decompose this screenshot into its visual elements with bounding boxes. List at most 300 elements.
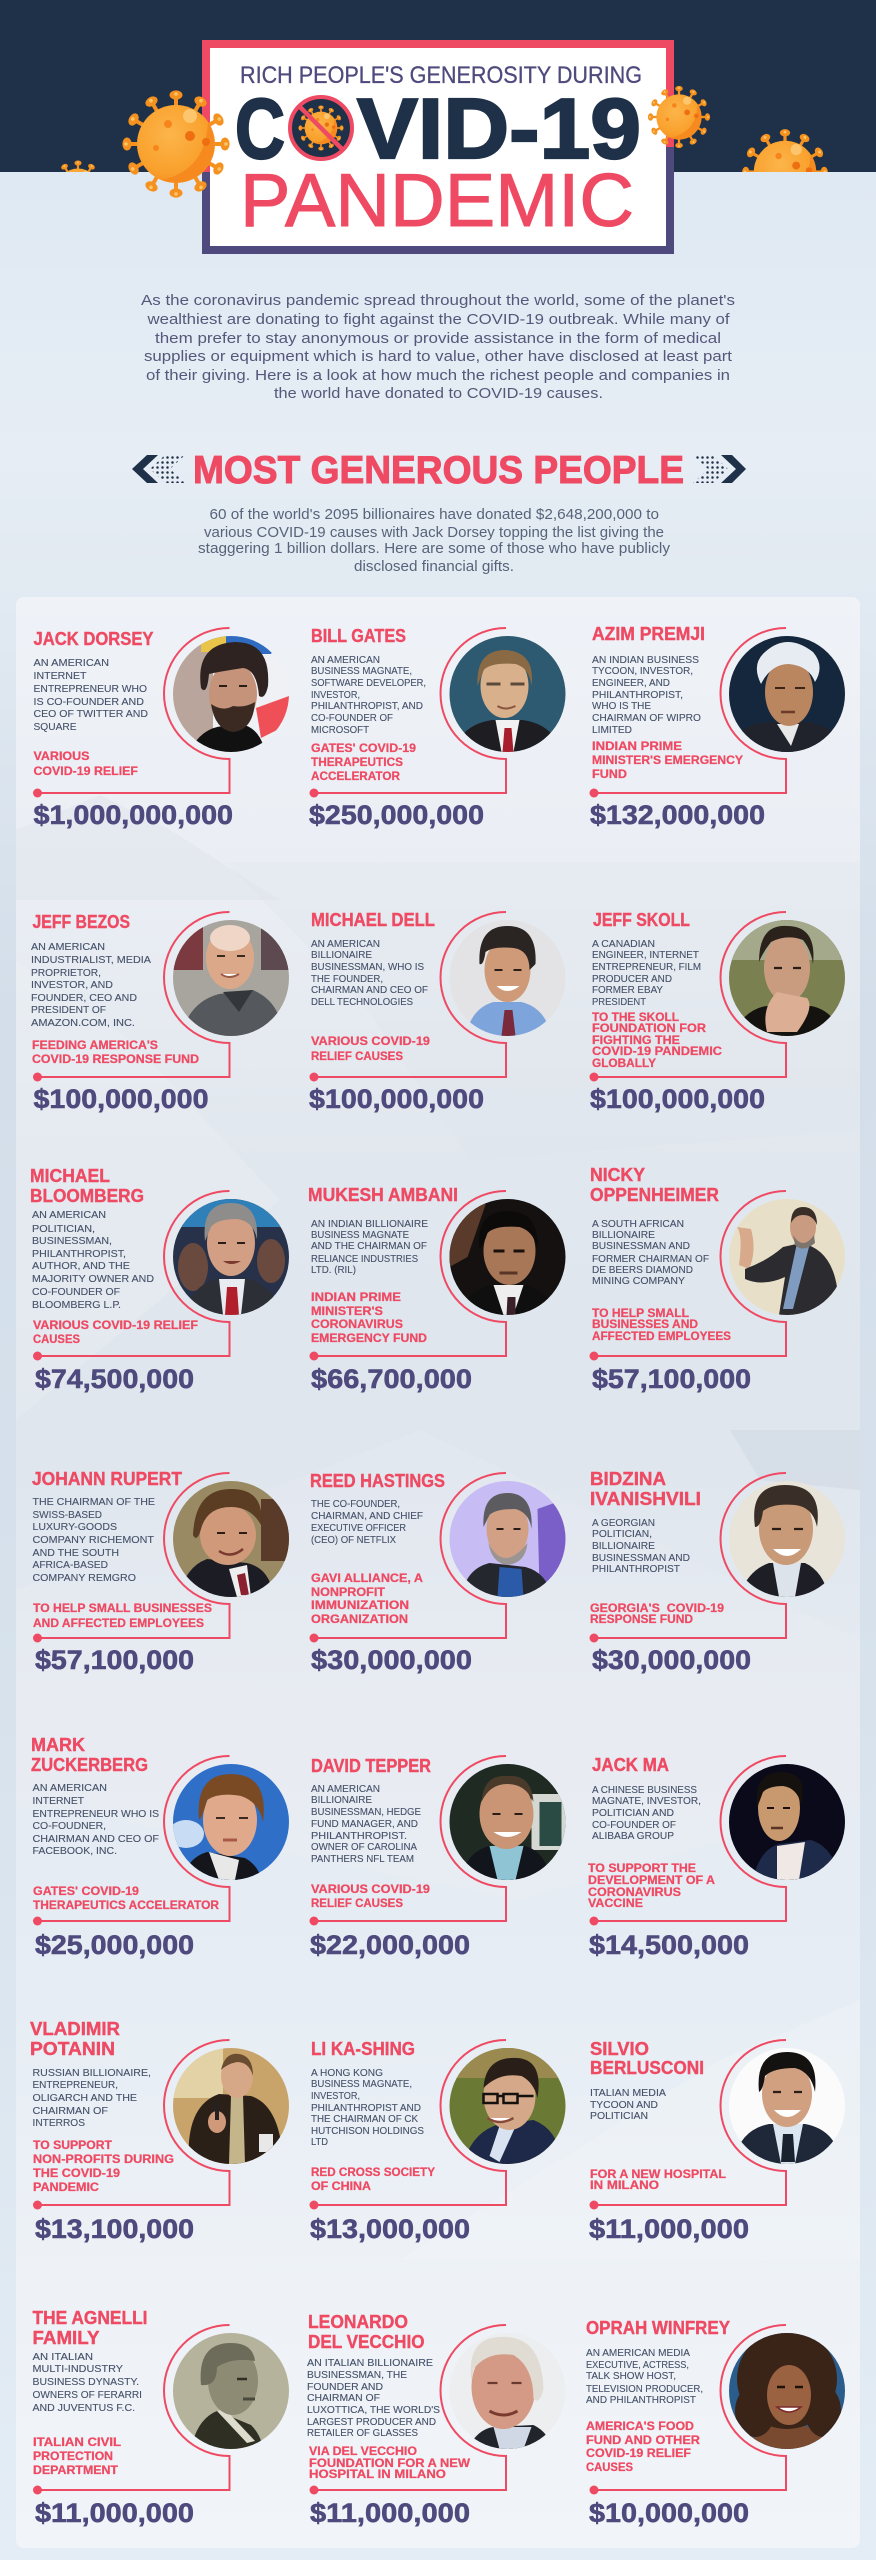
connector line bbox=[590, 2325, 786, 2494]
description: OWNERS OF FERARRI bbox=[32, 2389, 142, 2401]
description: BUSINESSMAN, WHO IS bbox=[311, 961, 424, 973]
cause: TO HELP SMALL BUSINESSES bbox=[33, 1603, 212, 1615]
card: Nicky Oppenheimer bbox=[590, 1165, 845, 1394]
description: A SOUTH AFRICAN bbox=[592, 1218, 684, 1230]
amount: $100,000,000 bbox=[34, 1084, 208, 1114]
description: SOFTWARE DEVELOPER, bbox=[311, 677, 426, 689]
amount: $11,000,000 bbox=[589, 2214, 749, 2244]
name: DEL VECCHIO bbox=[308, 2332, 424, 2352]
connector line bbox=[33, 1756, 230, 1926]
name: LI KA-SHING bbox=[311, 2039, 415, 2059]
description: A CANADIAN bbox=[592, 938, 655, 950]
description bbox=[32, 1209, 154, 1311]
description: SQUARE bbox=[34, 721, 76, 733]
name: FAMILY bbox=[32, 2328, 100, 2348]
cause: FUND bbox=[592, 769, 627, 781]
section intro text: various COVID-19 causes with Jack Dorsey topping the list giving the bbox=[204, 524, 664, 541]
cause: CAUSES bbox=[33, 1334, 80, 1346]
description bbox=[592, 1218, 709, 1287]
description: LTD. (RIL) bbox=[311, 1264, 356, 1276]
section intro text: disclosed financial gifts. bbox=[354, 558, 514, 575]
description: BUSINESS DYNASTY. bbox=[32, 2376, 139, 2388]
description: BUSINESSMAN AND bbox=[592, 1552, 690, 1564]
icon: large virus left of title bbox=[122, 90, 230, 198]
description: CHAIRMAN OF WIPRO bbox=[592, 712, 701, 724]
cause: PANDEMIC bbox=[33, 2182, 99, 2194]
name bbox=[31, 1735, 148, 1775]
description: TYCOON AND bbox=[590, 2099, 658, 2111]
description: POLITICIAN, bbox=[592, 1528, 652, 1540]
description: THE FOUNDER, bbox=[311, 973, 383, 985]
description: LUXOTTICA, THE WORLD'S bbox=[307, 2404, 440, 2416]
description bbox=[311, 2067, 424, 2148]
description: BUSINESS MAGNATE, bbox=[311, 2078, 412, 2090]
portrait bbox=[173, 2048, 289, 2164]
amount: $66,700,000 bbox=[311, 1364, 472, 1394]
cause: AMERICA'S FOOD bbox=[586, 2421, 694, 2433]
card: Vladimir Potanin bbox=[30, 2019, 289, 2244]
card: The Agnelli Family bbox=[32, 2308, 289, 2528]
cause: VARIOUS COVID-19 RELIEF bbox=[33, 1320, 198, 1332]
intro paragraph: As the coronavirus pandemic spread throughout the world, some of the planet's bbox=[141, 292, 735, 309]
description: COMPANY REMGRO bbox=[32, 1572, 136, 1584]
description: BUSINESSMAN, bbox=[32, 1235, 112, 1247]
cause: FEEDING AMERICA'S bbox=[32, 1040, 158, 1052]
description: EXECUTIVE, ACTRESS, bbox=[586, 2359, 689, 2371]
cause bbox=[311, 2167, 435, 2193]
cause: BUSINESSES AND bbox=[592, 1319, 698, 1331]
description: CO-FOUNDER OF bbox=[311, 712, 393, 724]
description: IS CO-FOUNDER AND bbox=[34, 696, 144, 708]
description bbox=[32, 2351, 142, 2414]
section intro text: 60 of the world's 2095 billionaires have donated $2,648,200,000 to bbox=[210, 506, 659, 523]
connector line bbox=[310, 2325, 506, 2494]
description: RETAILER OF GLASSES bbox=[307, 2427, 418, 2439]
portrait bbox=[729, 920, 845, 1036]
name bbox=[30, 1166, 144, 1206]
description: INTERNET bbox=[32, 1795, 85, 1807]
connector line bbox=[590, 1473, 786, 1642]
portrait bbox=[729, 1199, 845, 1315]
description: ITALIAN MEDIA bbox=[590, 2087, 666, 2099]
portrait bbox=[173, 920, 289, 1036]
amount: $57,100,000 bbox=[35, 1645, 194, 1675]
amount: $10,000,000 bbox=[589, 2498, 749, 2528]
cause: GEORGIA'S COVID-19 bbox=[590, 1603, 724, 1615]
description: ENTREPRENEUR WHO IS bbox=[32, 1808, 159, 1820]
cause: INDIAN PRIME bbox=[311, 1292, 401, 1304]
name bbox=[590, 1165, 719, 1205]
description: LTD bbox=[311, 2136, 328, 2148]
cause: GAVI ALLIANCE, A bbox=[311, 1573, 423, 1585]
description: TELEVISION PRODUCER, bbox=[586, 2383, 703, 2395]
card: Jeff Skoll bbox=[590, 910, 845, 1114]
description: POLITICIAN, bbox=[32, 1223, 95, 1235]
intro paragraph: wealthiest are donating to fight against the COVID-19 outbreak. While many of bbox=[146, 311, 730, 328]
description: BILLIONAIRE bbox=[311, 949, 372, 961]
intro paragraph bbox=[141, 292, 735, 402]
connector line bbox=[590, 1191, 786, 1360]
cause: COVID-19 RELIEF bbox=[34, 766, 138, 778]
amount: $25,000,000 bbox=[35, 1930, 194, 1960]
description bbox=[32, 1496, 155, 1584]
portrait bbox=[462, 2336, 552, 2449]
description: LUXURY-GOODS bbox=[32, 1521, 117, 1533]
description: AN AMERICAN bbox=[34, 657, 109, 669]
connector line bbox=[33, 1191, 230, 1360]
description: AND PHILANTHROPIST bbox=[586, 2394, 697, 2406]
cause bbox=[590, 1603, 724, 1626]
portrait bbox=[729, 1481, 845, 1597]
connector line bbox=[590, 628, 786, 798]
name: MICHAEL DELL bbox=[311, 910, 435, 930]
description: COMPANY RICHEMONT bbox=[32, 1534, 155, 1546]
description bbox=[592, 1517, 690, 1575]
connector line bbox=[310, 628, 506, 798]
description: FUND MANAGER, AND bbox=[311, 1818, 418, 1830]
header band bbox=[0, 0, 876, 172]
description: OWNER OF CAROLINA bbox=[311, 1841, 417, 1853]
card: Azim Premji bbox=[590, 624, 845, 830]
intro paragraph: of their giving. Here is a look at how much the richest people and companies in bbox=[146, 367, 730, 384]
amount: $74,500,000 bbox=[35, 1364, 194, 1394]
portrait bbox=[173, 2333, 289, 2449]
portrait bbox=[450, 1481, 566, 1597]
card: Bill Gates bbox=[309, 626, 566, 830]
description bbox=[592, 1784, 701, 1842]
connector line bbox=[33, 1473, 230, 1642]
name bbox=[590, 2039, 704, 2078]
cause: DEVELOPMENT OF A bbox=[588, 1875, 715, 1887]
description: ENTREPRENEUR, bbox=[32, 2079, 118, 2091]
name: IVANISHVILI bbox=[590, 1489, 701, 1509]
cause bbox=[592, 1308, 731, 1343]
connector line bbox=[33, 2040, 230, 2210]
description: BUSINESS MAGNATE bbox=[311, 1229, 409, 1241]
cause: ORGANIZATION bbox=[311, 1614, 408, 1626]
description: PANTHERS NFL TEAM bbox=[311, 1853, 414, 1865]
description bbox=[311, 654, 426, 736]
cause: GATES' COVID-19 bbox=[33, 1886, 139, 1898]
description: AFRICA-BASED bbox=[32, 1559, 108, 1571]
description: ENGINEER, INTERNET bbox=[592, 949, 700, 961]
description: CO-FOUNDER OF bbox=[32, 1286, 120, 1298]
portrait bbox=[450, 636, 566, 752]
description bbox=[311, 1218, 428, 1276]
description: LARGEST PRODUCER AND bbox=[307, 2416, 436, 2428]
cause bbox=[590, 2169, 726, 2192]
description: MAJORITY OWNER AND bbox=[32, 1273, 154, 1285]
description: AND THE CHAIRMAN OF bbox=[311, 1240, 427, 1252]
description: THE CHAIRMAN OF CK bbox=[311, 2113, 418, 2125]
heading: most generous people: MOST GENEROUS PEOPLE bbox=[193, 449, 684, 492]
description: CHAIRMAN OF bbox=[307, 2392, 380, 2404]
cause: IMMUNIZATION bbox=[311, 1600, 409, 1612]
cause: NON-PROFITS DURING bbox=[33, 2154, 174, 2166]
amount: $132,000,000 bbox=[590, 800, 765, 830]
cause bbox=[32, 1040, 199, 1066]
name bbox=[590, 1469, 701, 1509]
description: AN AMERICAN bbox=[311, 1783, 380, 1795]
name: ZUCKERBERG bbox=[31, 1755, 148, 1775]
cause bbox=[592, 741, 743, 781]
description bbox=[590, 2087, 666, 2122]
description: AN AMERICAN bbox=[311, 938, 380, 950]
portrait bbox=[450, 1764, 566, 1880]
description: PHILANTHROPIST, bbox=[592, 689, 683, 701]
cause: AND AFFECTED EMPLOYEES bbox=[33, 1618, 204, 1630]
description: SWISS-BASED bbox=[32, 1509, 102, 1521]
description: OLIGARCH AND THE bbox=[32, 2092, 137, 2104]
name bbox=[30, 2019, 120, 2059]
cause: COVID-19 RELIEF bbox=[586, 2448, 691, 2460]
description: CEO OF TWITTER AND bbox=[34, 708, 148, 720]
name: MICHAEL bbox=[30, 1166, 110, 1186]
description: INVESTOR, AND bbox=[31, 979, 113, 991]
title box bbox=[202, 40, 674, 254]
section intro text: staggering 1 billion dollars. Here are some of those who have publicly bbox=[198, 540, 671, 557]
cause: INDIAN PRIME bbox=[592, 741, 682, 753]
card: Leonardo Del Vecchio bbox=[307, 2312, 566, 2528]
card: Mukesh Ambani bbox=[308, 1185, 566, 1394]
description: INDUSTRIALIST, MEDIA bbox=[31, 954, 151, 966]
cause: RELIEF CAUSES bbox=[311, 1051, 403, 1063]
name: JEFF BEZOS bbox=[32, 912, 130, 932]
cause: ACCELERATOR bbox=[311, 771, 401, 783]
cause bbox=[33, 2437, 121, 2477]
intro paragraph: them prefer to stay anonymous or provide assistance in the form of medical bbox=[155, 330, 721, 347]
description bbox=[592, 654, 701, 736]
portrait bbox=[450, 920, 566, 1036]
description: CO-FOUNDER OF bbox=[592, 1819, 676, 1831]
description: TALK SHOW HOST, bbox=[586, 2370, 676, 2382]
portrait bbox=[173, 636, 289, 752]
cause: GLOBALLY bbox=[592, 1058, 656, 1070]
portrait bbox=[729, 2329, 845, 2449]
portrait bbox=[729, 1764, 845, 1880]
cause: RESPONSE FUND bbox=[590, 1614, 693, 1626]
cause: EMERGENCY FUND bbox=[311, 1333, 427, 1345]
card: Michael Dell bbox=[309, 910, 566, 1114]
icon: crossed-out virus in the letter O bbox=[290, 97, 352, 159]
description: CHAIRMAN AND CEO OF bbox=[32, 1833, 159, 1845]
card: Jeff Bezos bbox=[31, 912, 289, 1114]
description bbox=[592, 938, 701, 1008]
name: JACK MA bbox=[592, 1755, 669, 1775]
card: Bidzina Ivanishvili bbox=[590, 1469, 845, 1675]
description: INTERROS bbox=[32, 2117, 85, 2129]
description: A GEORGIAN bbox=[592, 1517, 655, 1529]
connector line bbox=[33, 2325, 230, 2494]
cause: FOUNDATION FOR bbox=[592, 1023, 707, 1035]
cause: THERAPEUTICS bbox=[311, 757, 403, 769]
connector line bbox=[310, 1756, 506, 1926]
connector line bbox=[33, 912, 230, 1082]
name bbox=[308, 2312, 424, 2352]
cause bbox=[33, 1603, 212, 1630]
description: PHILANTHROPIST bbox=[592, 1563, 681, 1575]
description: DELL TECHNOLOGIES bbox=[311, 996, 413, 1008]
amount: $100,000,000 bbox=[309, 1084, 484, 1114]
card: David Tepper bbox=[310, 1756, 566, 1960]
card: Li Ka-Shing bbox=[310, 2039, 566, 2244]
cause bbox=[34, 751, 138, 778]
panel: donors background bbox=[16, 597, 860, 2548]
card: Silvio Berlusconi bbox=[589, 2039, 845, 2244]
description: BILLIONAIRE bbox=[592, 1229, 655, 1241]
name: THE AGNELLI bbox=[32, 2308, 148, 2328]
description: AMAZON.COM, INC. bbox=[31, 1017, 135, 1029]
name: MARK bbox=[31, 1735, 85, 1755]
cause: TO THE SKOLL bbox=[592, 1012, 679, 1024]
icon: small virus right of title bbox=[648, 86, 710, 148]
cause: RELIEF CAUSES bbox=[311, 1898, 403, 1910]
icon: virus peeking right bbox=[742, 129, 828, 215]
cause bbox=[311, 1884, 430, 1910]
cause: CAUSES bbox=[586, 2462, 633, 2474]
cause: VARIOUS COVID-19 bbox=[311, 1036, 430, 1048]
amount: $1,000,000,000 bbox=[34, 800, 233, 830]
description: AN AMERICAN MEDIA bbox=[586, 2347, 690, 2359]
description: (CEO) OF NETFLIX bbox=[311, 1534, 396, 1546]
cause: THERAPEUTICS ACCELERATOR bbox=[33, 1900, 220, 1912]
card: Jack Dorsey bbox=[33, 628, 289, 830]
description: PHILANTHROPIST. bbox=[311, 1830, 407, 1842]
description: PHILANTHROPIST AND bbox=[311, 2102, 421, 2114]
amount: $57,100,000 bbox=[592, 1364, 751, 1394]
description: RUSSIAN BILLIONAIRE, bbox=[32, 2067, 151, 2079]
title line: COVID-19: C bbox=[235, 82, 285, 177]
portrait bbox=[729, 2048, 845, 2164]
connector line bbox=[33, 628, 230, 798]
cause: PROTECTION bbox=[33, 2451, 113, 2463]
cause: MINISTER'S bbox=[311, 1306, 383, 1318]
description bbox=[311, 938, 428, 1008]
description: TYCOON, INVESTOR, bbox=[592, 665, 693, 677]
amount: $100,000,000 bbox=[590, 1084, 765, 1114]
description: MINING COMPANY bbox=[592, 1275, 685, 1287]
description: MULTI-INDUSTRY bbox=[32, 2363, 123, 2375]
name: BERLUSCONI bbox=[590, 2058, 704, 2078]
cause: OF CHINA bbox=[311, 2181, 371, 2193]
cause: VARIOUS bbox=[34, 751, 90, 763]
cause: TO SUPPORT THE bbox=[588, 1863, 696, 1875]
description: ENGINEER, AND bbox=[592, 677, 670, 689]
name: DAVID TEPPER bbox=[311, 1756, 431, 1776]
amount: $11,000,000 bbox=[310, 2498, 470, 2528]
description: THE CO-FOUNDER, bbox=[311, 1498, 400, 1510]
name: REED HASTINGS bbox=[310, 1471, 445, 1491]
name: AZIM PREMJI bbox=[592, 624, 705, 644]
card: Oprah Winfrey bbox=[586, 2318, 845, 2528]
description: FACEBOOK, INC. bbox=[32, 1845, 117, 1857]
description bbox=[307, 2357, 440, 2439]
description: HUTCHISON HOLDINGS bbox=[311, 2125, 424, 2137]
description: PROPRIETOR, bbox=[31, 967, 101, 979]
description: INVESTOR, bbox=[311, 2090, 360, 2102]
name: LEONARDO bbox=[308, 2312, 408, 2332]
cause bbox=[33, 2140, 174, 2194]
card: Mark Zuckerberg bbox=[31, 1735, 289, 1960]
name: BIDZINA bbox=[590, 1469, 666, 1489]
description bbox=[32, 1782, 159, 1857]
description: BUSINESS MAGNATE, bbox=[311, 665, 412, 677]
description: ALIBABA GROUP bbox=[592, 1830, 674, 1842]
name: VLADIMIR bbox=[30, 2019, 120, 2039]
description: FOUNDER AND bbox=[307, 2381, 383, 2393]
cause: DEPARTMENT bbox=[33, 2465, 118, 2477]
description: CHAIRMAN OF bbox=[32, 2105, 108, 2117]
description: CHAIRMAN AND CEO OF bbox=[311, 984, 428, 996]
description: FORMER EBAY bbox=[592, 984, 663, 996]
title line: rich people's generosity during: RICH PEOPLE'S GENEROSITY DURING bbox=[240, 62, 642, 89]
connector line bbox=[310, 912, 506, 1082]
connector line bbox=[590, 2040, 786, 2210]
description: AND THE SOUTH bbox=[32, 1547, 119, 1559]
description: PRODUCER AND bbox=[592, 973, 672, 985]
description: AUTHOR, AND THE bbox=[32, 1260, 130, 1272]
amount: $22,000,000 bbox=[310, 1930, 470, 1960]
portrait bbox=[173, 1481, 289, 1597]
portrait bbox=[450, 2048, 566, 2164]
description: PRESIDENT bbox=[592, 996, 647, 1008]
cause bbox=[33, 1320, 198, 1346]
portrait bbox=[173, 1199, 289, 1315]
portrait bbox=[450, 1199, 566, 1315]
description: LIMITED bbox=[592, 724, 632, 736]
cause: RED CROSS SOCIETY bbox=[311, 2167, 435, 2179]
connector line bbox=[310, 1191, 506, 1360]
cause: AFFECTED EMPLOYEES bbox=[592, 1331, 731, 1343]
description: CO-FOUDNER, bbox=[32, 1820, 106, 1832]
description: BUSINESSMAN AND bbox=[592, 1240, 690, 1252]
amount: $13,100,000 bbox=[35, 2214, 194, 2244]
description bbox=[32, 2067, 151, 2129]
connector line bbox=[590, 912, 786, 1082]
name: OPPENHEIMER bbox=[590, 1185, 719, 1205]
name: NICKY bbox=[590, 1165, 645, 1185]
description bbox=[586, 2347, 703, 2406]
description: AN AMERICAN bbox=[31, 941, 105, 953]
intro paragraph: supplies or equipment which is hard to value, other have disclosed at least part bbox=[144, 348, 733, 365]
cause bbox=[33, 1886, 220, 1912]
cause: COVID-19 PANDEMIC bbox=[592, 1046, 722, 1058]
connector line bbox=[310, 1473, 506, 1642]
cause bbox=[586, 2421, 701, 2474]
description: INTERNET bbox=[34, 670, 87, 682]
description bbox=[311, 1498, 423, 1546]
description: AN INDIAN BILLIONAIRE bbox=[311, 1218, 428, 1230]
description: AN AMERICAN bbox=[32, 1782, 107, 1794]
cause: ITALIAN CIVIL bbox=[33, 2437, 121, 2449]
description: CHAIRMAN, AND CHIEF bbox=[311, 1510, 423, 1522]
cause: VARIOUS COVID-19 bbox=[311, 1884, 430, 1896]
name: OPRAH WINFREY bbox=[586, 2318, 730, 2338]
amount: $30,000,000 bbox=[592, 1645, 751, 1675]
title line: COVID-19: O bbox=[292, 82, 350, 177]
description: BUSINESSMAN, THE bbox=[307, 2369, 407, 2381]
connector line bbox=[310, 2040, 506, 2210]
card: Michael Bloomberg bbox=[30, 1166, 289, 1394]
description bbox=[34, 657, 148, 733]
description: AN ITALIAN bbox=[32, 2351, 93, 2363]
cause: THE COVID-19 bbox=[33, 2168, 120, 2180]
card: Johann Rupert bbox=[32, 1469, 289, 1675]
name bbox=[32, 2308, 148, 2348]
intro paragraph: the world have donated to COVID-19 causes. bbox=[274, 385, 603, 402]
cause bbox=[592, 1012, 722, 1070]
title line: PANDEMIC: PANDEMIC bbox=[240, 158, 634, 242]
